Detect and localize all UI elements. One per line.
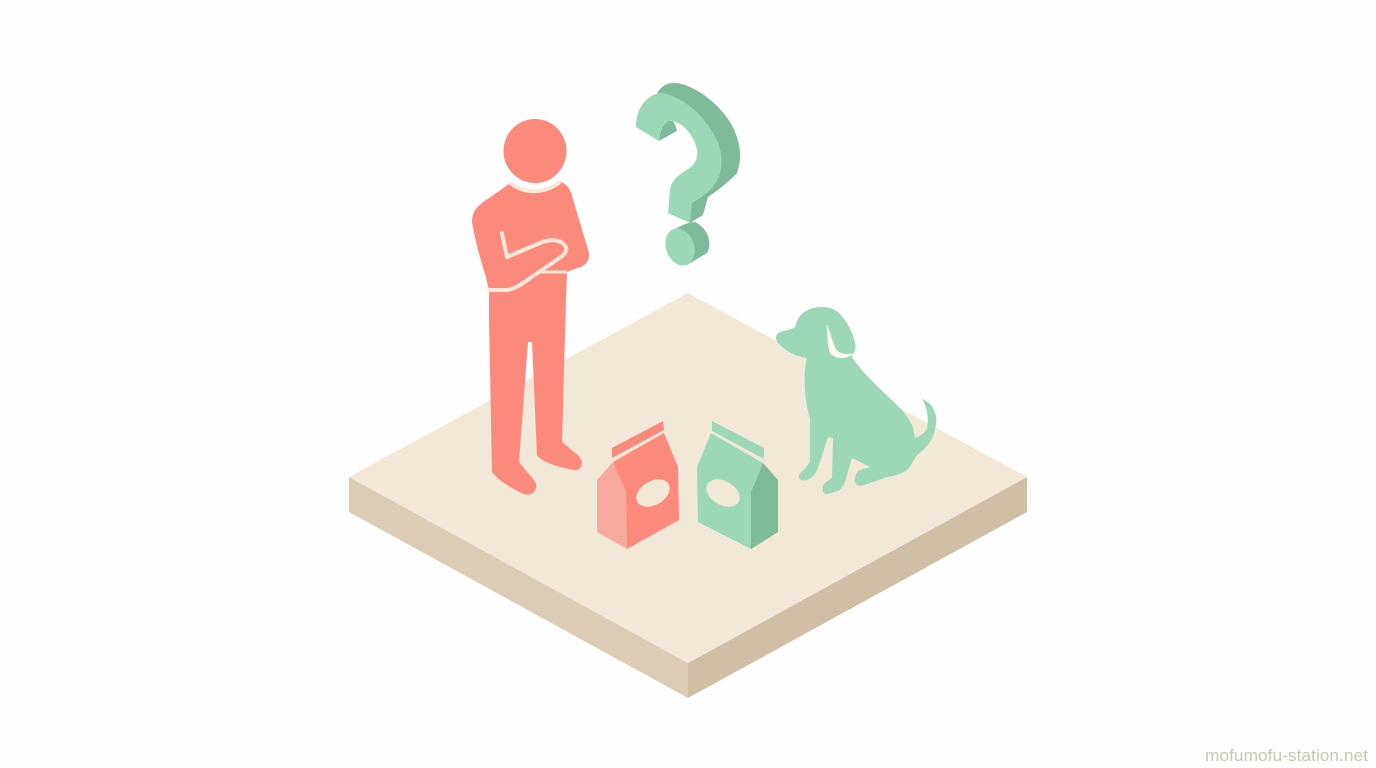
dog <box>776 307 936 494</box>
green food bag <box>697 421 778 549</box>
dot of question mark <box>673 222 709 265</box>
ear line <box>827 325 853 358</box>
forearm line <box>538 270 567 274</box>
platform <box>349 293 1027 698</box>
person with crossed arms <box>472 119 589 495</box>
crossed arm lines <box>489 233 566 290</box>
head <box>504 119 566 183</box>
watermark: mofumofu-station.net <box>1205 746 1368 765</box>
red food bag <box>597 421 679 549</box>
neck line <box>510 182 560 191</box>
question mark <box>636 83 740 270</box>
